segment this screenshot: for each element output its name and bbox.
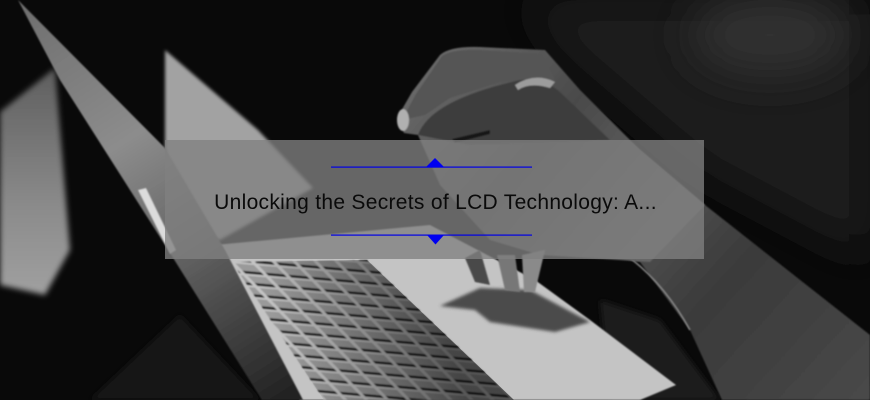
hand shadow (440, 288, 590, 332)
fingernail (397, 109, 409, 131)
keyboard shading (232, 260, 514, 400)
blurred background screen (165, 50, 313, 240)
arm (520, 95, 870, 400)
hand (397, 47, 705, 292)
laptop lid (18, 0, 303, 400)
arm edge highlight (630, 258, 690, 330)
knuckle highlight (515, 78, 555, 90)
fingers on the trackpad (465, 250, 490, 285)
lid highlight (138, 188, 176, 254)
laptop base (215, 225, 676, 400)
upper finger (402, 50, 555, 120)
top divider with up arrow (331, 158, 532, 168)
lower finger (418, 80, 610, 145)
title: Unlocking the Secrets of LCD Technology: A... (214, 191, 657, 214)
ring (452, 130, 490, 143)
translucent title banner (165, 140, 704, 259)
bottom divider with down arrow (331, 234, 532, 244)
keyboard (232, 260, 514, 400)
